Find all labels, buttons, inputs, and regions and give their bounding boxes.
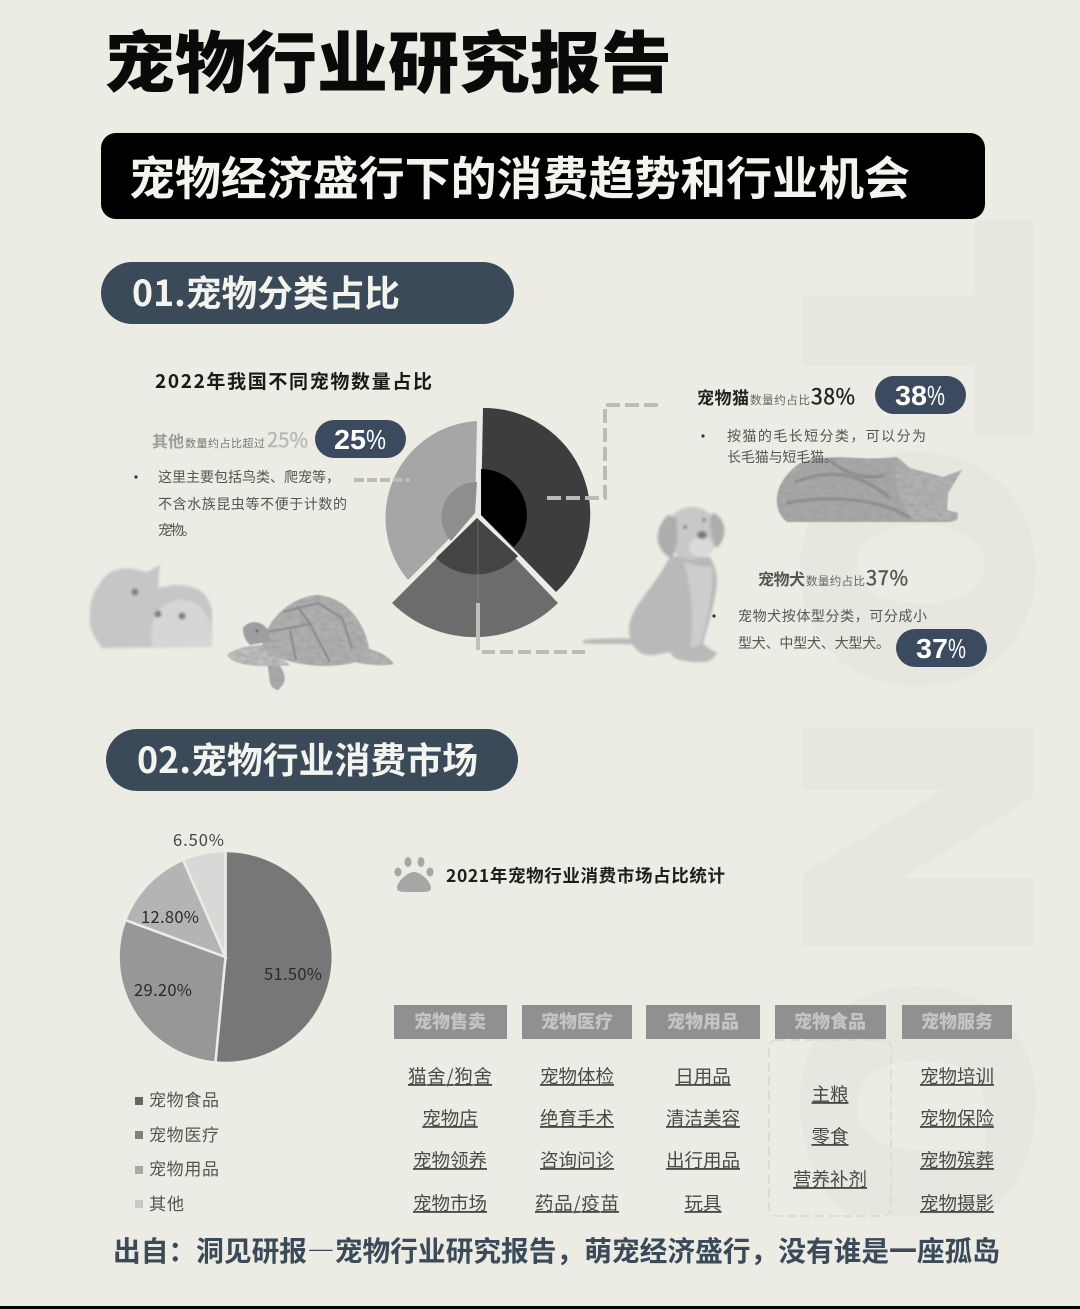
column: pet food: 主粮 <box>811 1081 849 1107</box>
table: market categories <box>394 1005 1012 1216</box>
badge: 38%: % <box>927 380 945 411</box>
column: pet food: 营养补剂 <box>793 1166 867 1192</box>
pie legend: 宠物医疗 <box>149 1121 219 1146</box>
badge: 25% <box>315 420 406 458</box>
chart heading: pet share: 2022年我国不同宠物数量占比 <box>155 367 432 394</box>
section heading 01: 01.宠物分类占比 <box>132 265 400 317</box>
source footer: 出自：洞见研报—宠物行业研究报告，萌宠经济盛行，没有谁是一座孤岛 <box>113 1230 1000 1270</box>
section heading 02: 02.宠物行业消费市场 <box>137 732 478 784</box>
callout: other <box>134 420 406 540</box>
pie legend: 宠物食品 <box>149 1086 219 1111</box>
section heading 02 <box>106 729 518 791</box>
column: pet services <box>902 1005 1012 1216</box>
callout: cats: 数量约占比 <box>750 392 810 408</box>
pie chart: consumption market <box>119 827 333 1063</box>
callout: cats: 38% <box>811 381 855 411</box>
column: pet food <box>769 1005 891 1216</box>
column: pet medical: 药品/疫苗 <box>535 1190 619 1216</box>
callout: other: 其他 <box>152 428 184 452</box>
badge: 37%: 37 <box>916 633 948 664</box>
segmented pie chart: pet types <box>385 408 590 637</box>
dashed connector lines <box>354 405 660 652</box>
badge: 37%: % <box>948 633 966 664</box>
callout: other: 不含水族昆虫等不便于计数的 <box>158 494 347 514</box>
column: pet medical <box>522 1005 632 1216</box>
callout: other: 数量约占比超过 <box>185 435 265 451</box>
column: pet sales: 宠物店 <box>422 1105 478 1131</box>
title: 宠物行业研究报告 <box>104 10 672 107</box>
pie chart: consumption market: 6.50% <box>173 827 224 851</box>
column: pet medical: 宠物医疗 <box>541 1008 613 1034</box>
badge: 38%: 38 <box>895 380 927 411</box>
column: pet sales: 宠物市场 <box>413 1190 487 1216</box>
illustration: hamsters <box>90 565 212 648</box>
section heading 01 <box>101 262 514 324</box>
column: pet services: 宠物保险 <box>920 1105 994 1131</box>
pie legend: 其他 <box>149 1190 184 1215</box>
badge: 37% <box>896 629 987 667</box>
column: pet food: 零食 <box>811 1123 849 1149</box>
slice: supplies 12.8% <box>125 860 226 957</box>
column: pet supplies: 日用品 <box>675 1063 731 1089</box>
illustration: sleeping cat <box>777 457 962 522</box>
callout: other: 25% <box>267 424 308 453</box>
badge: 38% <box>875 376 966 414</box>
slice: medical 29.2% <box>119 920 226 1062</box>
segment: cats 38% <box>481 408 590 592</box>
icon: paw <box>394 857 434 892</box>
callout: dogs <box>712 562 987 667</box>
column: pet sales: 猫舍/狗舍 <box>408 1063 492 1089</box>
callout: cats: 按猫的毛长短分类，可以分为 <box>727 426 926 446</box>
callout: other: 宠物。 <box>158 520 196 540</box>
column: pet supplies <box>646 1005 760 1216</box>
column: pet services: 宠物服务 <box>921 1008 993 1034</box>
callout: other: 这里主要包括鸟类、爬宠等， <box>158 467 340 487</box>
badge: 25%: % <box>366 424 386 455</box>
column: pet supplies: 清洁美容 <box>666 1105 740 1131</box>
callout: cats <box>697 376 966 467</box>
column: pet supplies: 出行用品 <box>666 1147 740 1173</box>
pie chart: consumption market: 51.50% <box>264 961 322 985</box>
background watermark letters <box>800 220 1036 1215</box>
column: pet supplies: 玩具 <box>684 1190 722 1216</box>
callout: dogs: 宠物犬按体型分类，可分成小 <box>738 606 927 626</box>
subtitle banner <box>101 133 985 219</box>
callout: dogs: 宠物犬 <box>758 566 805 590</box>
column: pet sales: 宠物售卖 <box>414 1008 486 1034</box>
callout: dogs: 数量约占比 <box>806 573 865 589</box>
column: pet services: 宠物摄影 <box>920 1190 994 1216</box>
segment: other 25% <box>385 421 477 580</box>
column: pet services: 宠物殡葬 <box>920 1147 994 1173</box>
callout: dogs: 37% <box>866 562 908 591</box>
slice: other 6.5% <box>183 851 226 957</box>
column: pet services: 宠物培训 <box>920 1063 994 1089</box>
pie legend: 宠物用品 <box>149 1155 219 1180</box>
callout: dogs: 型犬、中型犬、大型犬。 <box>738 633 890 653</box>
illustration: puppy <box>583 507 725 662</box>
column: pet medical: 咨询问诊 <box>540 1147 614 1173</box>
subtitle banner: 宠物经济盛行下的消费趋势和行业机会 <box>129 143 910 209</box>
illustration: tortoise <box>227 595 394 690</box>
column: pet sales: 宠物领养 <box>413 1147 487 1173</box>
chart heading: market: 2021年宠物行业消费市场占比统计 <box>446 863 725 888</box>
column: pet medical: 宠物体检 <box>540 1063 614 1089</box>
slice: food 51.5% <box>215 851 333 1063</box>
column: pet medical: 绝育手术 <box>540 1105 614 1131</box>
callout: cats: 长毛猫与短毛猫。 <box>727 447 838 467</box>
pie chart: consumption market: 12.80% <box>141 904 199 928</box>
pie legend <box>135 1086 219 1215</box>
segment: dogs 37% <box>392 518 558 637</box>
badge: 25%: 25 <box>334 424 366 455</box>
callout: cats: 宠物猫 <box>697 384 749 409</box>
pie chart: consumption market: 29.20% <box>134 977 192 1001</box>
column: pet food: 宠物食品 <box>794 1008 866 1034</box>
column: pet sales <box>394 1005 507 1216</box>
column: pet supplies: 宠物用品 <box>667 1008 739 1034</box>
